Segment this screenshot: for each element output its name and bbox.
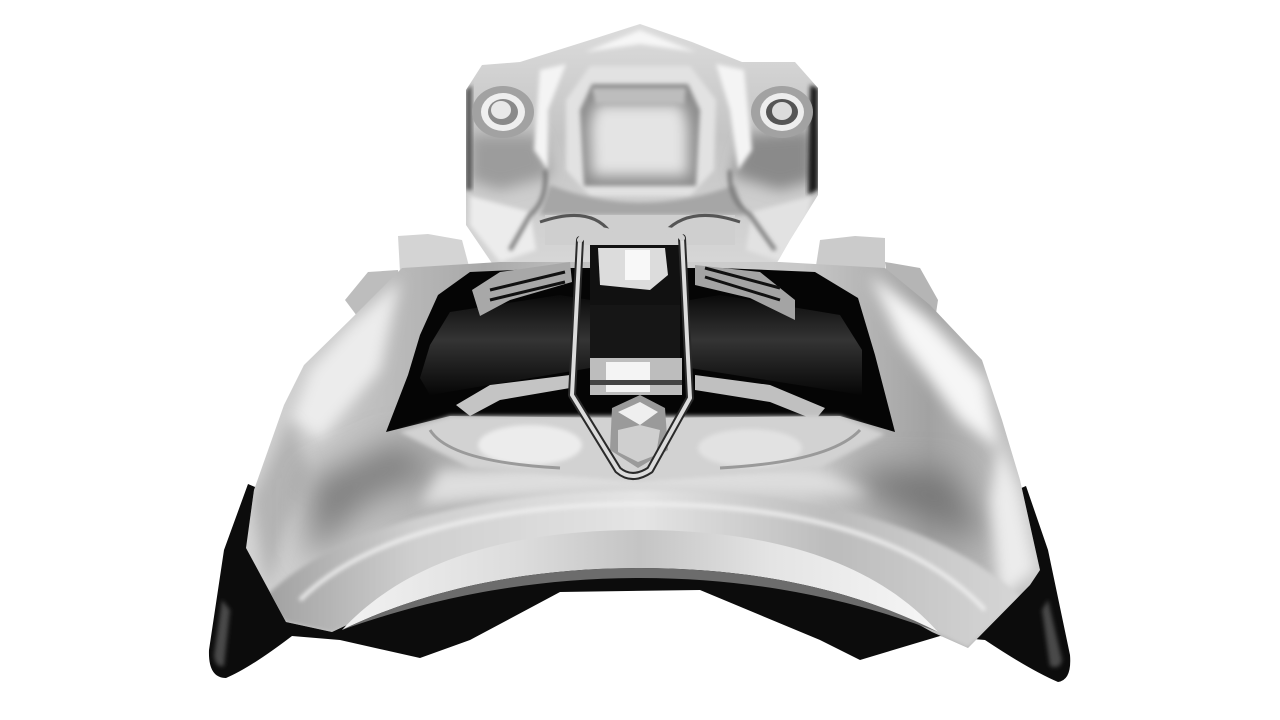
bracket shading — [470, 135, 552, 190]
lower shadow edge — [342, 568, 938, 632]
icon: right bolt hole — [751, 86, 813, 138]
side tabs — [345, 234, 938, 320]
bracket central recess — [566, 66, 716, 196]
retaining wire — [572, 230, 690, 476]
left brake pad — [420, 295, 590, 395]
arch ridge line — [300, 504, 985, 610]
body shading — [252, 275, 1036, 648]
black backing plate — [209, 484, 1070, 682]
inner arch lip — [342, 530, 938, 632]
lower boss surface — [400, 416, 885, 482]
plate highlights — [214, 600, 1062, 667]
icon: left bolt hole — [472, 86, 534, 138]
upper right clip — [695, 265, 795, 320]
lower right clip — [695, 375, 825, 420]
upper left clip — [472, 262, 572, 316]
lower left clip — [456, 375, 570, 416]
top mounting bracket — [466, 24, 818, 275]
window opening with brake pads — [386, 262, 895, 432]
illustration: brake caliper — [208, 24, 1070, 682]
hex bolt — [610, 395, 668, 468]
right brake pad — [690, 295, 862, 395]
main caliper body — [246, 262, 1040, 648]
front arch band — [262, 490, 1022, 648]
centre bridge and pin assembly — [590, 245, 682, 395]
